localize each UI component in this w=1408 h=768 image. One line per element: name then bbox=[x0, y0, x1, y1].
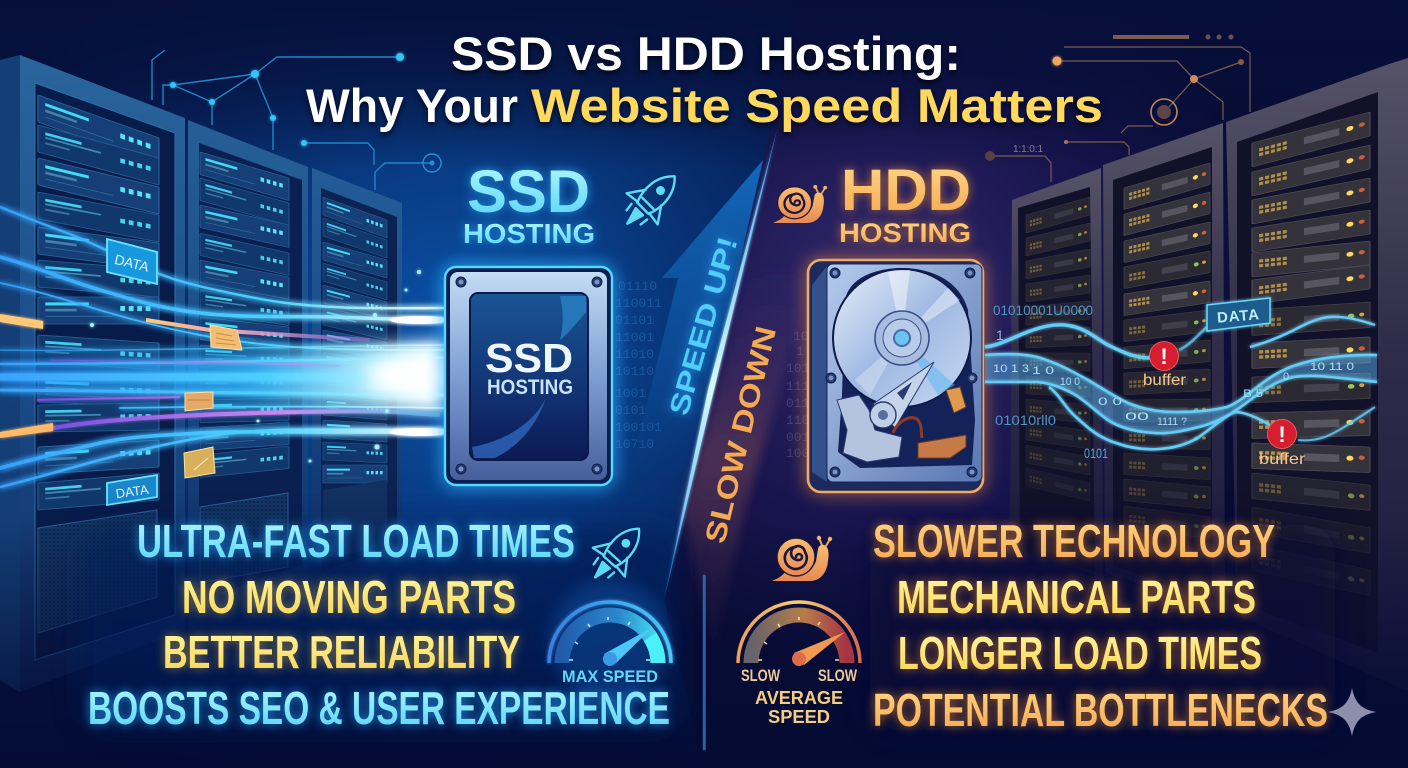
background: right purple side bbox=[664, 0, 1408, 768]
title: Why Your bbox=[306, 79, 518, 132]
buffer alert 1: ! bbox=[1160, 344, 1168, 369]
bottom fade bbox=[0, 520, 1408, 768]
right circuit network: 1:1:0:1 bbox=[1013, 144, 1043, 155]
gauge: max speed bbox=[549, 580, 671, 700]
hdd binary labels: 1 bbox=[996, 327, 1004, 343]
hdd drive bbox=[804, 256, 987, 496]
drawback: mechanical: MECHANICAL PARTS bbox=[897, 571, 1256, 623]
binary digits beside hdd: 001 bbox=[786, 430, 810, 445]
benefit: moving parts: NO MOVING PARTS bbox=[182, 571, 516, 623]
gauge: average speed: SPEED bbox=[768, 707, 830, 727]
hdd heading bbox=[839, 158, 971, 248]
hdd stream digits: 10 0 bbox=[1060, 376, 1080, 388]
hdd head latch bbox=[946, 387, 966, 413]
server rack left 1 bbox=[0, 55, 185, 692]
binary digits beside hdd: 101 bbox=[786, 361, 810, 376]
data tag on hdd stream bbox=[1207, 298, 1270, 331]
hdd binary labels: 01010rll0 bbox=[995, 412, 1056, 428]
buffer alert 1 bbox=[1143, 342, 1187, 389]
server rack left 2 bbox=[188, 120, 308, 630]
hdd stream digits: 0 bbox=[1283, 371, 1289, 383]
hdd stream digits: 10 11 0 bbox=[1310, 361, 1354, 373]
drawback: load times: LONGER LOAD TIMES bbox=[898, 627, 1262, 679]
server rack right C bbox=[1226, 58, 1408, 690]
hdd stream digits: 1 0 bbox=[1032, 365, 1054, 377]
binary digits beside hdd: 10 bbox=[793, 329, 809, 344]
slow down label: SLOW DOWN bbox=[700, 323, 783, 547]
icon: snail near hdd heading bbox=[773, 185, 827, 223]
hdd copper board bbox=[918, 435, 966, 458]
halo behind right list bbox=[870, 525, 1335, 730]
binary digits behind ssd: 10710 bbox=[615, 437, 654, 452]
binary digits behind ssd bbox=[615, 279, 662, 452]
icon: rocket lower left bbox=[579, 514, 655, 592]
hdd cable bbox=[893, 418, 922, 438]
data tag upper left bbox=[107, 239, 157, 284]
binary digits behind ssd: 11001 bbox=[615, 330, 654, 345]
binary digits behind ssd: 1001 bbox=[615, 386, 646, 401]
left circuit network bbox=[152, 50, 441, 190]
icon: rocket near ssd heading bbox=[612, 161, 690, 239]
binary digits beside hdd: 100 bbox=[786, 446, 809, 461]
file card 1 bbox=[210, 325, 242, 350]
data tag on hdd stream: DATA bbox=[1216, 306, 1260, 327]
file card 3 bbox=[184, 447, 215, 478]
lower divider line bbox=[703, 575, 706, 750]
server rack right B bbox=[1103, 123, 1225, 612]
title bbox=[306, 27, 1103, 132]
hdd stream digits bbox=[993, 361, 1354, 428]
divider glowing streak bbox=[664, 130, 777, 600]
hdd binary labels: 01010001U0000 bbox=[993, 302, 1093, 318]
hdd heading: HOSTING bbox=[839, 218, 971, 248]
binary digits behind ssd: 100101 bbox=[615, 420, 662, 435]
top darkening band bbox=[0, 0, 1408, 170]
title: SSD vs HDD Hosting: bbox=[451, 27, 961, 80]
binary digits beside hdd: 011 bbox=[786, 396, 810, 411]
gauge: average speed: SLOW bbox=[741, 666, 781, 685]
data tag lower left: DATA bbox=[115, 482, 150, 501]
server rack left 3 bbox=[312, 168, 402, 590]
gauge: average speed: AVERAGE bbox=[755, 688, 843, 708]
benefit: seo: BOOSTS SEO & USER EXPERIENCE bbox=[88, 682, 670, 734]
gauge: average speed: SLOW bbox=[818, 666, 858, 685]
benefit: load times: ULTRA-FAST LOAD TIMES bbox=[137, 515, 575, 567]
drawback: technology: SLOWER TECHNOLOGY bbox=[873, 515, 1275, 567]
hdd actuator arm bbox=[837, 362, 934, 462]
ssd heading: HOSTING bbox=[463, 218, 595, 249]
background: left blue side bbox=[0, 0, 800, 768]
hdd binary labels: 0101 bbox=[1084, 445, 1108, 461]
ssd heading: SSD bbox=[467, 158, 590, 225]
data tag lower left bbox=[107, 475, 157, 505]
hdd stream digits: 1111 ? bbox=[1157, 416, 1187, 428]
ssd label: SSD bbox=[485, 335, 573, 381]
ssd label bbox=[485, 335, 573, 399]
right circuit network bbox=[985, 34, 1250, 182]
sparkle mark bbox=[1328, 688, 1376, 736]
hdd stream digits: B 5 bbox=[1243, 388, 1263, 400]
binary digits behind ssd: 11010 bbox=[615, 347, 654, 362]
buffer alert 1: buffer bbox=[1143, 372, 1187, 389]
hdd drawbacks list bbox=[873, 515, 1328, 736]
binary digits behind ssd: 10110 bbox=[615, 364, 654, 379]
hdd platter bbox=[833, 269, 971, 407]
icon: snail lower right bbox=[772, 536, 832, 581]
binary digits behind ssd: 01101 bbox=[615, 313, 654, 328]
hdd stream digits: 00 bbox=[1125, 411, 1149, 423]
binary digits beside hdd bbox=[786, 329, 810, 461]
binary digits behind ssd: 110011 bbox=[615, 296, 662, 311]
ssd drive bbox=[440, 262, 617, 490]
buffer alert 2: ! bbox=[1278, 422, 1286, 447]
gauge: average speed bbox=[738, 602, 860, 727]
hdd data stream bbox=[985, 302, 1377, 461]
speed up arrow bbox=[628, 160, 763, 480]
buffer alert 2: buffer bbox=[1259, 451, 1306, 468]
binary digits behind ssd: 0101 bbox=[615, 403, 646, 418]
benefit: reliability: BETTER RELIABILITY bbox=[163, 626, 520, 678]
halo behind left list bbox=[80, 525, 680, 730]
gauge: max speed: MAX SPEED bbox=[562, 667, 658, 686]
binary digits beside hdd: 1 bbox=[796, 344, 804, 359]
hdd binary labels bbox=[993, 302, 1108, 461]
binary digits beside hdd: 111 bbox=[786, 379, 810, 394]
ssd benefits list bbox=[88, 515, 670, 734]
hdd stream digits: 10 1 3 bbox=[993, 363, 1029, 375]
ssd data stream bbox=[0, 207, 483, 487]
title: Website Speed Matters bbox=[531, 79, 1103, 132]
file card 2 bbox=[185, 392, 213, 411]
server rack right A bbox=[1010, 168, 1103, 577]
panel: slow down wedge bbox=[682, 260, 815, 655]
ssd label: HOSTING bbox=[487, 376, 573, 399]
hdd heading: HDD bbox=[841, 158, 971, 223]
ssd heading bbox=[463, 158, 595, 249]
binary digits beside hdd: 110 bbox=[786, 413, 809, 428]
hdd stream digits: 0 0 bbox=[1098, 396, 1122, 408]
binary digits behind ssd: 01110 bbox=[618, 279, 657, 294]
buffer alert 2 bbox=[1259, 420, 1306, 468]
data tag upper left: DATA bbox=[113, 251, 151, 275]
speed up label: SPEED UP! bbox=[663, 233, 743, 419]
